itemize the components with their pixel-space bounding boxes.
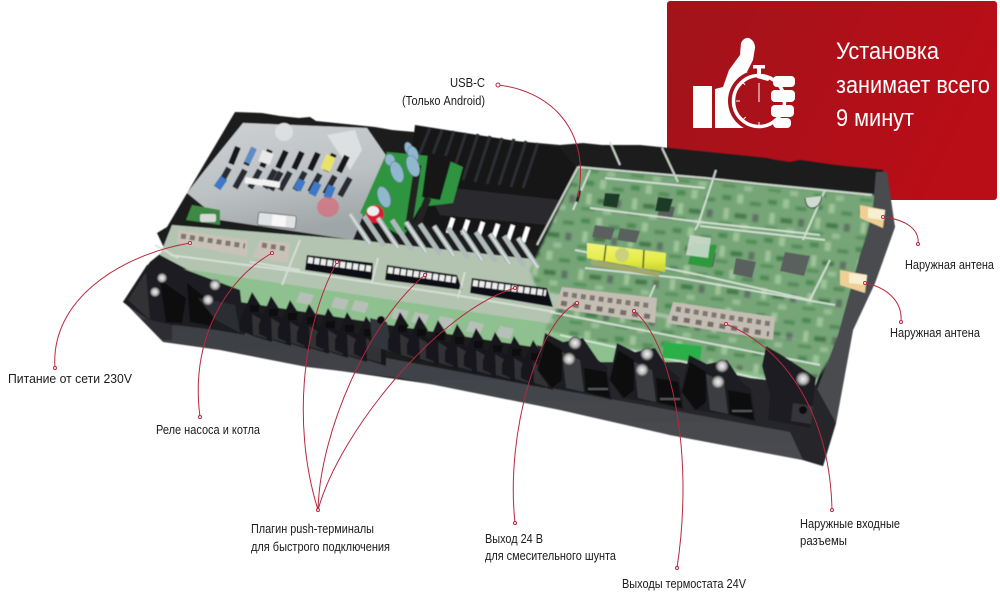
antenna line 2 bbox=[864, 282, 902, 324]
icon: thumbs up with stopwatch bbox=[693, 38, 795, 132]
front face bbox=[124, 300, 836, 466]
label: 24 V output: для смесительного шунта bbox=[485, 549, 616, 563]
clear frame rails bbox=[537, 142, 872, 392]
glass tubes bbox=[350, 214, 538, 268]
callout lines bbox=[54, 83, 920, 570]
fuse bbox=[257, 212, 297, 229]
clear frames on left deck bbox=[155, 240, 555, 312]
pink reflection bbox=[317, 197, 339, 217]
cream terminals bbox=[177, 230, 775, 340]
24 V line bbox=[513, 302, 578, 524]
push terminal lines bbox=[303, 260, 516, 512]
left mid deck bbox=[160, 225, 830, 395]
label: USB-C: (Только Android) bbox=[402, 94, 485, 108]
label: push terminals bbox=[251, 522, 390, 554]
label: external inputs: Наружные входные bbox=[800, 517, 900, 531]
fuse slots bbox=[217, 147, 350, 198]
antennas bbox=[840, 205, 885, 293]
label: external inputs bbox=[800, 517, 900, 548]
label: external antenna 2: Наружная антена bbox=[890, 326, 980, 340]
label: mains power: Питание от сети 230V bbox=[8, 372, 133, 386]
power line bbox=[54, 242, 192, 370]
device body bbox=[123, 112, 895, 466]
push terminals bbox=[305, 255, 553, 307]
label: 24 V output bbox=[485, 532, 616, 563]
label: USB-C: USB-C bbox=[450, 76, 485, 90]
small bright green board bbox=[662, 342, 702, 362]
green strip under frames bbox=[178, 268, 810, 400]
label: push terminals: Плагин push-терминалы bbox=[251, 522, 374, 536]
relay line bbox=[198, 252, 274, 418]
dark backing of front terminals bbox=[240, 302, 836, 466]
black usb port bbox=[575, 190, 581, 202]
center PCB with capacitors bbox=[360, 141, 463, 237]
label: USB-C bbox=[402, 76, 485, 108]
small chips bbox=[603, 193, 673, 212]
label: external inputs: разъемы bbox=[800, 534, 847, 548]
panel: installation time bbox=[667, 1, 997, 200]
right PCB bbox=[530, 142, 877, 392]
small left board bbox=[186, 205, 220, 225]
heatsink area bbox=[405, 125, 578, 242]
thermostat line bbox=[632, 310, 683, 570]
right side wall bbox=[805, 172, 895, 466]
external input line bbox=[724, 322, 834, 512]
panel text: 9 минут bbox=[836, 105, 914, 132]
label: push terminals: для быстрого подключения bbox=[251, 540, 390, 554]
spirit level bbox=[587, 243, 666, 277]
thermostat terminal teeth bbox=[240, 292, 553, 390]
panel text: Установка bbox=[836, 38, 940, 65]
panel text bbox=[836, 38, 990, 132]
antenna line 1 bbox=[882, 216, 920, 246]
small green board bbox=[688, 243, 717, 268]
label: 24 V output: Выход 24 В bbox=[485, 532, 543, 546]
u-clip bbox=[805, 196, 822, 208]
device: heating controller bbox=[123, 112, 895, 466]
white slots bbox=[448, 218, 528, 242]
screw terminal blocks bbox=[537, 333, 816, 428]
label: thermostat outputs: Выходы термостата 24V bbox=[622, 577, 747, 591]
left terminal block bbox=[123, 262, 245, 340]
USB-C line bbox=[496, 83, 581, 197]
label: pump relay: Реле насоса и котла bbox=[156, 423, 260, 437]
cover bbox=[187, 123, 387, 240]
